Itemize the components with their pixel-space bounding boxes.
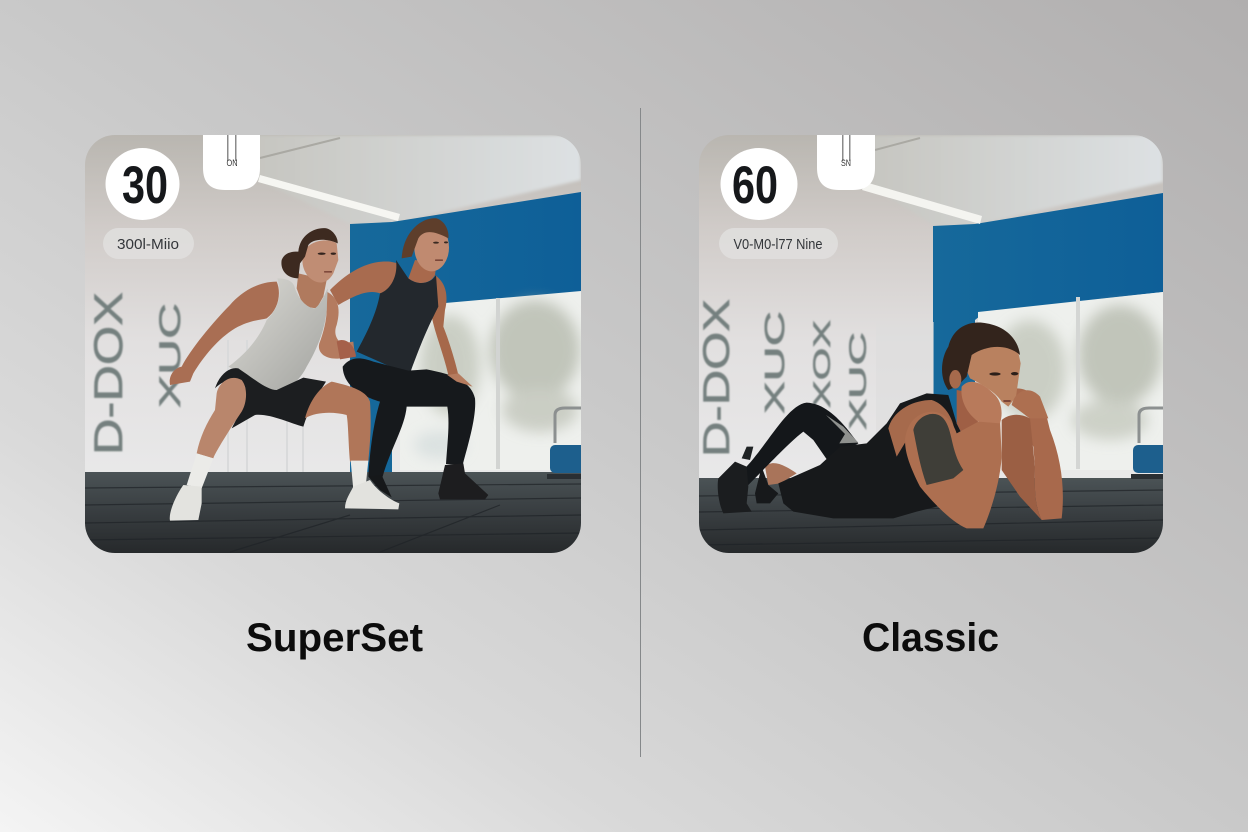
- tab: hanging tag: ON: [226, 158, 238, 168]
- divider line: [640, 108, 641, 757]
- panel: SuperSet: [85, 135, 590, 660]
- wall lettering: XUC: [759, 311, 790, 414]
- panel: Classic: [696, 135, 1169, 660]
- tab: hanging tag: [203, 135, 260, 190]
- badge: 30: [106, 148, 180, 220]
- pill label: duration: [719, 228, 838, 259]
- wall lettering: XUC: [845, 332, 872, 430]
- wall lettering: D-DOX: [87, 292, 131, 455]
- wall lettering: XUC: [154, 303, 187, 408]
- badge: 60: 60: [732, 156, 778, 215]
- person in white tank: [170, 228, 399, 521]
- wall lettering: [696, 299, 872, 457]
- person lying down: [718, 323, 1063, 528]
- tab: hanging tag: SN: [841, 158, 851, 168]
- heading: SuperSet: SuperSet: [246, 616, 423, 660]
- pill label: duration: [103, 228, 194, 259]
- pill label: duration: 300l-Miio: [117, 236, 179, 253]
- tab: hanging tag: [817, 135, 875, 190]
- photo: two athletes squatting in gym: [85, 135, 590, 553]
- heading: Classic: Classic: [862, 616, 999, 660]
- person in black tank: [330, 218, 488, 499]
- badge: 30: 30: [122, 156, 168, 215]
- wall lettering: D-DOX: [696, 299, 737, 457]
- wall lettering: [92, 292, 182, 452]
- pill label: duration: V0-M0-l77 Nine: [734, 236, 822, 253]
- badge: 60: [720, 148, 798, 220]
- photo: athlete lying on gym floor: [696, 135, 1169, 553]
- wall lettering: XOX: [809, 320, 836, 408]
